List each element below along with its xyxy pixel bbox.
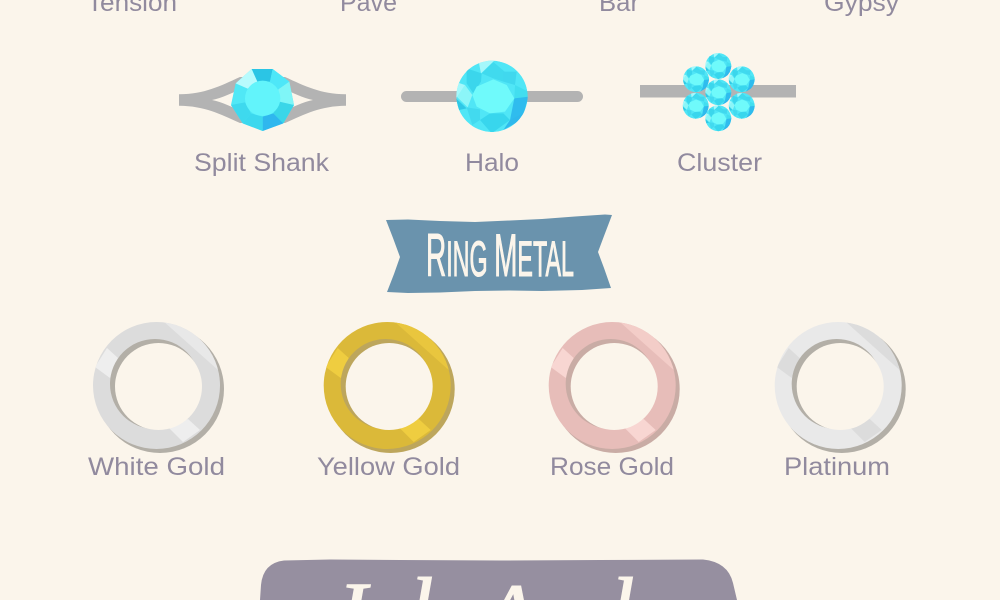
label: Cluster: Cluster xyxy=(677,149,762,177)
label: Platinum: Platinum xyxy=(784,453,890,481)
split shank band xyxy=(179,77,346,123)
platinum ring xyxy=(775,320,917,453)
yellow gold ring xyxy=(324,320,466,453)
cluster band xyxy=(640,85,796,98)
label: Split Shank: Split Shank xyxy=(194,149,330,177)
ring metal: yellow gold xyxy=(317,320,466,481)
top row of ring style labels xyxy=(87,0,900,17)
ribbon text: RING METAL xyxy=(426,222,574,289)
ribbon heading: Ring Metal xyxy=(386,214,612,293)
banner shape xyxy=(260,560,737,600)
halo gem xyxy=(455,60,528,133)
label: White Gold: White Gold xyxy=(88,453,225,481)
ring metal: rose gold xyxy=(548,322,680,475)
label: Rose Gold: Rose Gold xyxy=(550,453,674,481)
split shank gem xyxy=(231,69,294,131)
ring style: cluster xyxy=(640,53,796,177)
rose gold ring xyxy=(549,320,691,453)
label: Yellow Gold: Yellow Gold xyxy=(317,453,460,481)
bottom banner, cut off by the page edge xyxy=(260,559,737,600)
ring style: halo xyxy=(401,60,583,177)
label: Halo: Halo xyxy=(465,149,519,177)
halo band xyxy=(401,91,583,102)
white gold ring xyxy=(93,320,235,453)
ring metal: white gold xyxy=(88,322,224,475)
cluster gems xyxy=(682,53,755,132)
ring metal: platinum xyxy=(774,322,906,475)
ribbon shape xyxy=(386,214,612,293)
ring style: split shank xyxy=(179,69,346,177)
